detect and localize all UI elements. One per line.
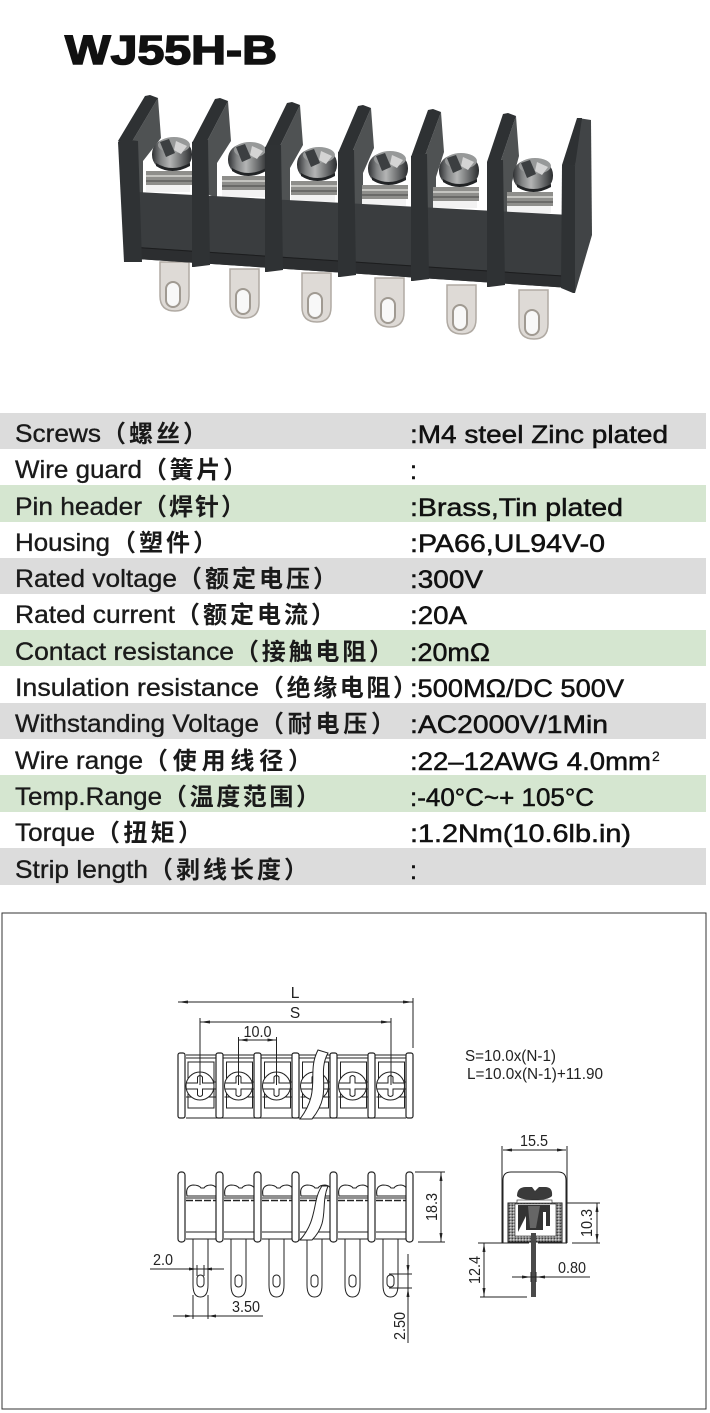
row: contact resistance: :20mΩ	[410, 639, 490, 667]
row: rated current	[15, 601, 467, 630]
front view: terminals	[178, 1172, 413, 1297]
row: wire range	[15, 747, 660, 776]
row: withstanding voltage: :AC2000V/1Min	[410, 711, 608, 739]
row: pin header	[0, 485, 706, 522]
row: screws: Screws	[15, 420, 101, 448]
photo: fins	[118, 95, 592, 293]
title: WJ55H-B	[65, 27, 277, 73]
dimension 0.80	[512, 1260, 590, 1282]
row: wire range: 2	[652, 748, 660, 764]
formula text	[465, 1048, 603, 1083]
side view: pin	[531, 1233, 536, 1297]
dimension 2.0: 2.0	[153, 1252, 173, 1269]
row: contact resistance: Contact resistance	[15, 638, 234, 666]
dimension S: S	[290, 1005, 300, 1022]
row: contact resistance: （接触电阻）	[235, 639, 393, 666]
drawing panel frame	[2, 913, 706, 1409]
dimension 12.4: 12.4	[467, 1256, 484, 1284]
top view drawing	[178, 985, 413, 1119]
row: housing	[15, 529, 605, 558]
row: wire range: （使用线径）	[144, 748, 312, 775]
row: wire guard: （簧片）	[143, 456, 247, 484]
row: insulation resistance	[15, 674, 624, 703]
dimension 18.3: 18.3	[424, 1193, 441, 1221]
top view: body	[178, 1050, 413, 1119]
row: wire range: Wire range	[15, 747, 143, 775]
row: temp range: Temp.Range	[15, 783, 162, 811]
row: torque: （扭矩）	[96, 820, 202, 847]
row: rated current: （额定电流）	[176, 602, 335, 629]
formula text: L=10.0x(N-1)+11.90	[467, 1066, 603, 1083]
row: pin header: :Brass,Tin plated	[410, 494, 623, 522]
front view drawing	[150, 1172, 445, 1343]
row: screws: （螺丝）	[102, 421, 207, 448]
side view: section	[508, 1187, 562, 1242]
dimension 10.3	[579, 1203, 598, 1243]
row: rated voltage: （额定电压）	[178, 566, 337, 593]
row: housing: （塑件）	[112, 530, 217, 557]
row: rated voltage: :300V	[410, 566, 483, 594]
row: housing: :PA66,UL94V-0	[410, 530, 605, 558]
dimension 2.50	[389, 1254, 412, 1343]
dimension 10.3: 10.3	[579, 1209, 596, 1237]
dimension 2.0	[150, 1252, 224, 1276]
row: withstanding voltage: Withstanding Voltage	[15, 710, 259, 738]
row: wire guard	[15, 456, 417, 485]
dimension 0.80: 0.80	[558, 1260, 586, 1277]
dimension 3.50	[173, 1295, 263, 1319]
dimension 3.50: 3.50	[232, 1299, 260, 1316]
row: wire guard: :	[410, 457, 417, 485]
row: rated voltage	[0, 558, 706, 594]
dimension 15.5: 15.5	[520, 1133, 548, 1150]
row: torque: Torque	[15, 819, 95, 847]
row: insulation resistance: （绝缘电阻）	[260, 675, 417, 702]
row: wire guard: Wire guard	[15, 456, 142, 484]
row: pin header: （焊针）	[143, 494, 245, 521]
photo: pins	[160, 262, 548, 339]
dimension 12.4	[467, 1243, 527, 1297]
row: strip length: （剥线长度）	[149, 857, 308, 884]
dimension L	[178, 985, 413, 1048]
row: pin header: Pin header	[15, 493, 142, 521]
dimension L: L	[291, 985, 300, 1002]
side view: housing	[502, 1172, 600, 1243]
row: insulation resistance: Insulation resistance	[15, 674, 259, 702]
photo: housing body	[137, 192, 570, 288]
row: withstanding voltage: （耐电压）	[260, 711, 395, 738]
row: torque: :1.2Nm(10.6lb.in)	[410, 820, 631, 848]
row: temp range: :-40°C~+ 105°C	[410, 784, 594, 812]
dimension 15.5	[502, 1133, 567, 1243]
row: strip length	[0, 848, 706, 885]
row: screws	[0, 413, 706, 449]
photo: barriers	[118, 139, 575, 293]
row: rated current: Rated current	[15, 601, 175, 629]
row: housing: Housing	[15, 529, 110, 557]
row: rated current: :20A	[410, 602, 467, 630]
row: temp range	[0, 775, 706, 812]
dimension 18.3	[415, 1172, 445, 1242]
row: screws: :M4 steel Zinc plated	[410, 421, 668, 449]
dimension 2.50: 2.50	[392, 1312, 409, 1340]
row: rated voltage: Rated voltage	[15, 565, 177, 593]
side view drawing	[467, 1133, 600, 1297]
row: withstanding voltage	[0, 703, 706, 739]
dimension 10.0: 10.0	[244, 1024, 272, 1041]
row: temp range: （温度范围）	[163, 784, 320, 811]
row: insulation resistance: :500MΩ/DC 500V	[410, 675, 624, 703]
dimension 10.0	[238, 1024, 276, 1085]
row: wire range: :22–12AWG 4.0mm	[410, 748, 651, 776]
dimension S	[200, 1005, 391, 1085]
row: contact resistance	[0, 630, 706, 667]
spec table	[0, 413, 706, 885]
row: strip length: :	[410, 857, 417, 885]
photo: screws	[146, 137, 553, 213]
product photo: terminal block	[118, 95, 592, 339]
formula text: S=10.0x(N-1)	[465, 1048, 556, 1065]
row: torque	[15, 819, 631, 848]
row: strip length: Strip length	[15, 856, 148, 884]
